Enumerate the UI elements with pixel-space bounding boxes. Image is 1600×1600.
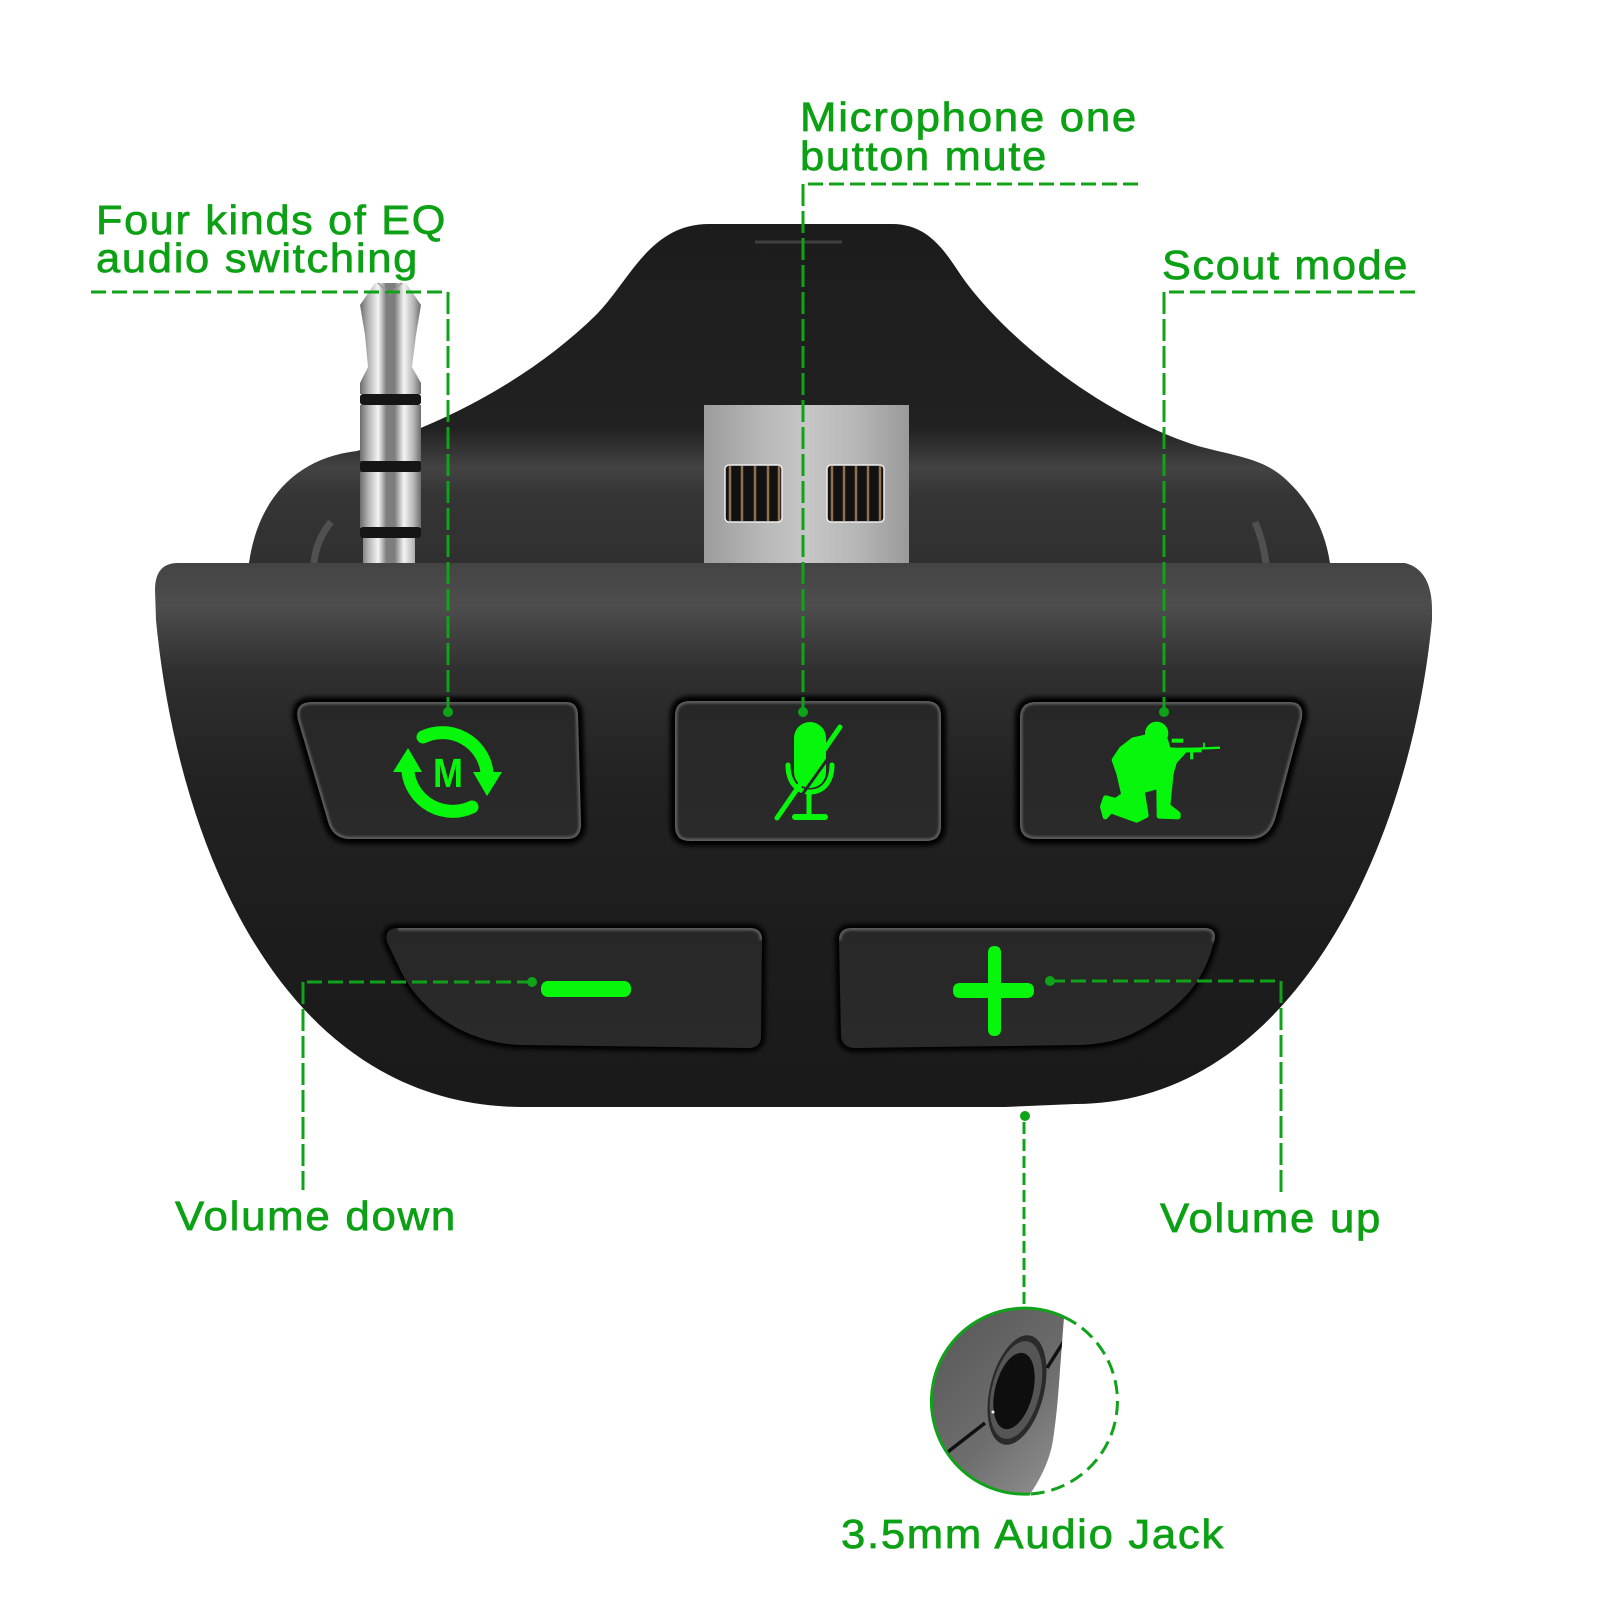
icon: minus xyxy=(541,981,631,997)
front housing xyxy=(155,563,1432,1107)
icon: muted microphone xyxy=(777,722,849,820)
adapter device xyxy=(155,224,1432,1107)
callout: volume down xyxy=(175,977,537,1239)
infographic canvas xyxy=(91,101,1432,1549)
callout: EQ switching xyxy=(91,197,453,717)
label text: Four kinds of EQ xyxy=(96,197,447,243)
callout: audio jack xyxy=(841,1111,1225,1557)
label text: Volume down xyxy=(175,1193,457,1239)
label text: 3.5mm Audio Jack xyxy=(841,1511,1225,1557)
icon: plus xyxy=(953,946,1034,1036)
mute button xyxy=(675,701,941,841)
icon: EQ cycle M: M xyxy=(433,750,463,796)
label text: audio switching xyxy=(96,235,419,281)
icon: kneeling soldier xyxy=(1103,722,1220,820)
label text: button mute xyxy=(800,133,1048,179)
callout: volume up xyxy=(1045,976,1382,1241)
callout: microphone mute xyxy=(798,94,1138,717)
USB connector xyxy=(704,405,909,565)
label text xyxy=(96,197,447,281)
rear housing xyxy=(249,224,1330,563)
3.5mm plug xyxy=(360,283,421,564)
USB contact left xyxy=(725,465,782,522)
right side groove xyxy=(1255,522,1266,563)
icon: EQ cycle M xyxy=(393,733,502,811)
callout: scout mode xyxy=(1159,242,1415,717)
label text xyxy=(800,94,1138,179)
label text: Scout mode xyxy=(1162,242,1409,288)
USB contact right xyxy=(827,465,884,522)
left side groove xyxy=(314,522,331,563)
top ridge xyxy=(755,240,842,244)
label text: Microphone one xyxy=(800,94,1138,140)
volume up button xyxy=(839,928,1215,1048)
EQ button xyxy=(297,702,581,839)
audio jack detail circle xyxy=(931,1308,1117,1494)
label text: Volume up xyxy=(1160,1195,1382,1241)
scout button xyxy=(1020,702,1302,839)
volume down button xyxy=(386,928,762,1048)
